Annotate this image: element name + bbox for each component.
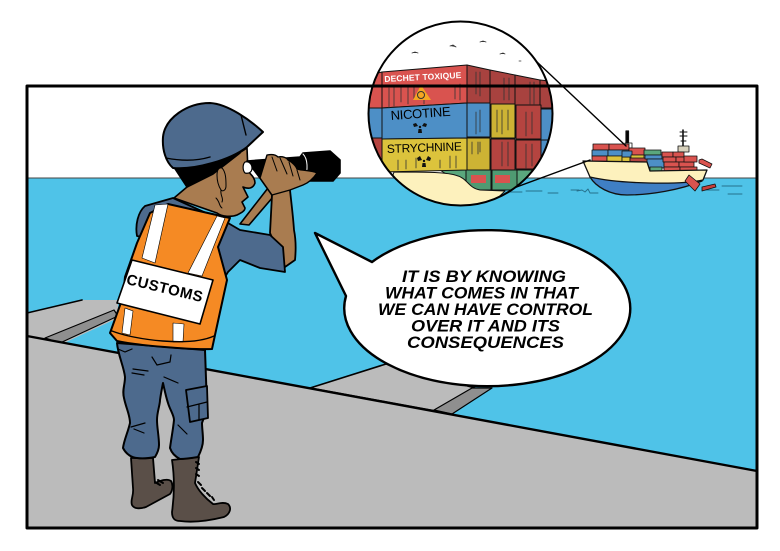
bubble text — [378, 268, 593, 352]
sea — [27, 178, 757, 473]
hazard triangle icon — [413, 88, 431, 100]
radiation icon strychnine — [417, 156, 431, 167]
ship — [583, 130, 716, 195]
magnified sea — [502, 190, 509, 195]
ship bow — [392, 172, 506, 204]
boots — [131, 457, 230, 522]
container labels: STRYCHNINE — [387, 139, 462, 156]
red container — [382, 65, 467, 108]
ear — [217, 168, 226, 191]
hull — [583, 161, 707, 195]
hand — [260, 155, 317, 195]
shirt — [136, 198, 285, 280]
fallen containers — [685, 175, 716, 191]
customs officer — [110, 103, 340, 522]
bubble text: CONSEQUENCES — [407, 334, 564, 352]
near forearm — [260, 178, 296, 267]
cap — [163, 103, 263, 168]
side containers at left — [370, 72, 382, 108]
customs badge: CUSTOMS — [125, 271, 204, 306]
far jetty right — [310, 364, 492, 414]
cargo pocket — [186, 386, 208, 422]
customs badge — [117, 260, 213, 324]
bubble text: OVER IT AND ITS — [411, 318, 560, 336]
hair — [168, 146, 240, 187]
container labels: NICOTINE — [390, 104, 451, 123]
cargo containers — [592, 144, 712, 171]
telescope — [243, 151, 340, 181]
trousers — [117, 343, 208, 459]
ripples — [510, 186, 742, 194]
green lower row — [440, 170, 532, 184]
speech bubble — [315, 230, 630, 386]
container corrugation — [389, 72, 534, 170]
yellow container — [382, 138, 467, 172]
bubble text: WHAT COMES IN THAT — [385, 284, 580, 302]
ship funnel and mast — [625, 130, 689, 152]
magnified view circle — [368, 20, 554, 206]
right side columns — [467, 65, 490, 103]
blue container — [382, 103, 467, 139]
radiation icon nicotine — [413, 123, 427, 133]
bubble text: IT IS BY KNOWING — [402, 268, 566, 286]
birds — [412, 41, 521, 61]
hi-vis vest — [110, 204, 230, 349]
panel frame — [27, 86, 757, 528]
far jetty left — [27, 300, 118, 344]
container labels — [384, 70, 462, 156]
quay ground — [27, 336, 757, 528]
magnifier leader lines — [503, 62, 626, 192]
neck and face — [174, 148, 255, 216]
far arm — [240, 188, 273, 225]
bubble text: WE CAN HAVE CONTROL — [378, 301, 593, 319]
container labels: DECHET TOXIQUE — [384, 70, 462, 84]
